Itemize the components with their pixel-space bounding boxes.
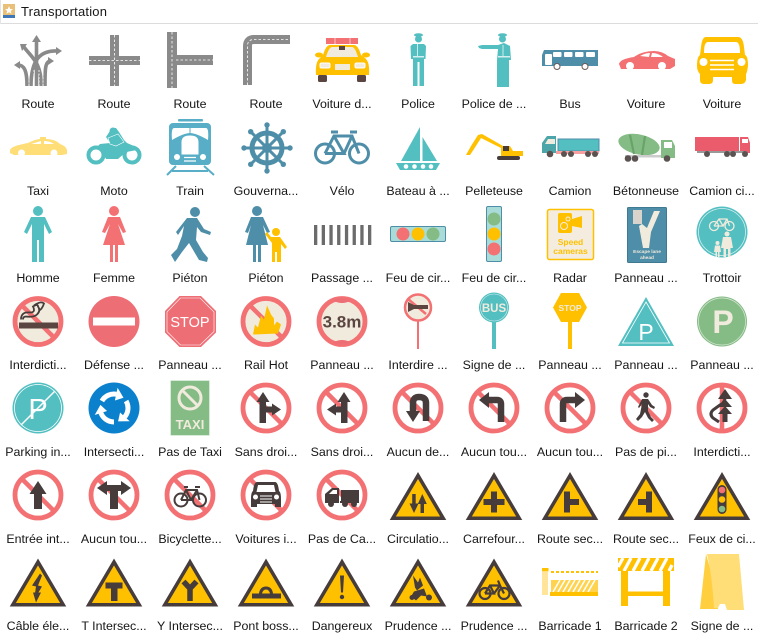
cell: Entrée interdite	[6, 472, 70, 546]
label: Panneau ...	[690, 358, 754, 372]
label: Route sec...	[537, 532, 603, 546]
cell: Vélo	[316, 132, 368, 198]
icon: arrows junction	[14, 35, 62, 86]
icon: no taxi sign: TAXI	[176, 417, 204, 432]
cell: Interdiction de dépasser	[693, 385, 751, 459]
icon: side road left	[621, 476, 671, 518]
label: Prudence ...	[385, 619, 451, 633]
cell: Femme	[93, 206, 135, 285]
icon: barricade one	[542, 568, 598, 596]
label: Route	[97, 97, 131, 111]
label: Aucun de...	[387, 445, 449, 459]
label: Pas de pi...	[615, 445, 677, 459]
cell: Trottoir	[696, 206, 748, 285]
cell: Aucun tourner droite	[537, 385, 603, 459]
cell: Câble électrique	[7, 562, 69, 633]
header icon	[3, 4, 15, 18]
icon: no overtaking	[699, 385, 745, 431]
label: Radar	[553, 271, 587, 285]
label: Aucun tou...	[537, 445, 603, 459]
icon: escape lane sign: Escape lane	[633, 249, 661, 255]
label: Piéton	[248, 271, 284, 285]
icon: excavator	[466, 134, 523, 160]
cell: Police de circulation	[462, 33, 526, 111]
cell: Bicyclettes interdites	[158, 472, 222, 546]
label: Câble éle...	[7, 619, 69, 633]
cell: Panneau 3.8m	[310, 298, 374, 372]
label: Passage ...	[311, 271, 373, 285]
icon: T intersection triangle	[89, 562, 139, 605]
icon: electric hazard triangle	[13, 562, 63, 605]
icon: T junction	[167, 32, 213, 88]
label: Bétonneuse	[613, 184, 679, 198]
label: Feux de ci...	[688, 532, 756, 546]
icon: red car	[619, 51, 675, 70]
label: Parking in...	[5, 445, 71, 459]
icon: roundabout	[88, 382, 140, 434]
label: Panneau ...	[614, 358, 678, 372]
cell: Voiture de police	[312, 38, 372, 111]
cell: Camion citerne	[689, 137, 755, 198]
icon: horizontal traffic light	[390, 226, 446, 242]
cell: Feu vertical	[462, 206, 526, 285]
icon: bus	[542, 50, 598, 70]
icon: sailboat	[396, 127, 440, 170]
cell: Bus	[542, 50, 598, 111]
cell: Panneau escape lane	[614, 208, 678, 285]
cell: Barricade 1	[538, 568, 602, 633]
icon: no straight or right	[243, 385, 289, 431]
cell: Voiture red	[619, 51, 675, 111]
cell: Interdiction de fumer	[9, 298, 67, 372]
icon: height limit: 3.8m	[323, 312, 361, 332]
label: Défense ...	[84, 358, 144, 372]
icon: taxi	[10, 137, 67, 156]
label: Carrefour...	[463, 532, 525, 546]
label: Y Intersec...	[157, 619, 223, 633]
label: Pelleteuse	[465, 184, 523, 198]
cell: Pelleteuse	[465, 134, 523, 198]
cell: Pas de piétons	[615, 385, 677, 459]
cell: Bateau	[386, 127, 450, 198]
icon: bicycle	[316, 132, 368, 163]
icon: no cars	[243, 472, 289, 518]
icon: speed camera sign: Speed	[558, 237, 583, 247]
icon: no entry	[88, 296, 140, 347]
icon: traffic light triangle	[697, 476, 747, 518]
icon: vertical traffic light	[486, 206, 502, 262]
icon: caution pedestrian triangle	[393, 562, 443, 605]
icon: no straight	[15, 472, 61, 518]
cell: Bétonneuse	[613, 130, 679, 198]
label: Moto	[100, 184, 128, 198]
icon: teal truck	[542, 136, 599, 157]
icon: woman	[102, 206, 126, 262]
cell: Panneau P circle	[690, 296, 754, 372]
icon: motorbike	[88, 128, 140, 162]
icon: stop octagon: STOP	[170, 315, 210, 331]
label: Pas de Taxi	[158, 445, 222, 459]
label: Aucun tou...	[81, 532, 147, 546]
icon: escape lane sign: ahead	[640, 255, 654, 261]
cell: Piéton with child	[245, 206, 287, 285]
label: Dangereux	[312, 619, 373, 633]
icon: policeman	[410, 33, 426, 86]
cell: Route corner	[248, 40, 290, 111]
cell: Route T	[167, 32, 213, 111]
icon: bus stop sign: BUS	[482, 303, 506, 315]
icon: caution bicycle triangle	[469, 562, 519, 605]
cell: Route junction	[14, 35, 62, 111]
cell: Carrefour	[463, 476, 525, 546]
cell: Pont bosse	[233, 562, 299, 633]
icon: stop on pole: STOP	[558, 303, 582, 313]
label: Voiture	[627, 97, 665, 111]
label: Camion ci...	[689, 184, 755, 198]
icon: no bicycles	[167, 472, 213, 518]
cell: Route secondaire left	[613, 476, 679, 546]
icon: traffic policeman	[478, 33, 511, 87]
icon: no u-turn	[395, 385, 441, 431]
icon: a-frame sign	[700, 554, 744, 610]
icon: hump bridge triangle	[241, 562, 291, 605]
label: Trottoir	[703, 271, 741, 285]
icon: no straight or left	[319, 385, 365, 431]
cell: Prudence bicycle	[461, 562, 527, 633]
icon: speed camera sign	[548, 210, 594, 260]
cell: Taxi	[10, 137, 67, 198]
icon: crossroads triangle	[469, 476, 519, 518]
cell: Circulation	[387, 476, 449, 546]
label: Voiture	[703, 97, 741, 111]
cell: Voitures interdites	[235, 472, 297, 546]
label: Train	[176, 184, 204, 198]
icon: no parking: P	[28, 394, 48, 426]
cell: Feu horizontal	[386, 226, 450, 285]
label: Pont boss...	[233, 619, 299, 633]
icon: two-way traffic triangle	[393, 476, 443, 518]
icon: no left turn	[471, 385, 517, 431]
cell: Défense d'entrer	[84, 296, 144, 372]
icon: side road right	[545, 476, 595, 518]
cell: Route secondaire right	[537, 476, 603, 546]
cell: Sans droit left	[311, 385, 373, 459]
label: Vélo	[330, 184, 355, 198]
label: Camion	[549, 184, 591, 198]
label: Bateau à ...	[386, 184, 450, 198]
icon: train	[167, 119, 214, 175]
icon: no left or right	[91, 472, 137, 518]
cell: Aucun tourner gauche	[461, 385, 527, 459]
icon: parking triangle: P	[638, 319, 654, 345]
icon: parent and child	[245, 206, 287, 262]
icon: escape lane sign	[628, 208, 666, 262]
cell: Prudence falling	[385, 562, 451, 633]
icon: police car	[315, 38, 370, 82]
label: Homme	[16, 271, 60, 285]
label: Route	[249, 97, 283, 111]
cell: Parking interdit	[5, 382, 71, 459]
cell: Aucun tournant	[81, 472, 147, 546]
cell: Interdire klaxon	[388, 294, 448, 372]
label: Interdicti...	[693, 445, 751, 459]
cell: Pas de Taxi	[158, 380, 222, 459]
cell: Sans droit right	[235, 385, 297, 459]
icon: crossroads	[89, 35, 140, 86]
cell: Moto	[88, 128, 140, 198]
icon: sidewalk sign	[696, 206, 748, 258]
label: Panneau ...	[614, 271, 678, 285]
icon: no smoking	[15, 298, 61, 344]
label: Interdire ...	[388, 358, 448, 372]
cell: Panneau P triangle	[614, 297, 678, 372]
label: Pas de Ca...	[308, 532, 376, 546]
header bar	[0, 0, 758, 24]
label: Circulatio...	[387, 532, 449, 546]
icon: yellow car front	[697, 37, 748, 84]
cell: Signe de chantier	[691, 554, 753, 633]
icon: road corner	[248, 40, 290, 85]
cell: Intersection giratoire	[84, 382, 144, 459]
label: T Intersec...	[81, 619, 147, 633]
label: Signe de ...	[463, 358, 525, 372]
label: Panneau ...	[158, 358, 222, 372]
cell: Panneau stop	[158, 296, 222, 372]
icon: pedestrian	[171, 207, 211, 262]
label: Route sec...	[613, 532, 679, 546]
label: Prudence ...	[461, 619, 527, 633]
cell: Gouvernail	[234, 122, 298, 198]
label: Police de ...	[462, 97, 526, 111]
label: Bus	[559, 97, 581, 111]
cell: Passage piéton	[311, 225, 373, 285]
cell: Police	[401, 33, 435, 111]
label: Femme	[93, 271, 135, 285]
icon: hot rail	[243, 298, 289, 344]
cell: Homme	[16, 206, 60, 285]
label: Taxi	[27, 184, 49, 198]
label: Feu de cir...	[462, 271, 526, 285]
icon: no trucks	[319, 472, 365, 518]
label: Bicyclette...	[158, 532, 222, 546]
title: Transportation	[21, 4, 107, 19]
label: Rail Hot	[244, 358, 289, 372]
label: Barricade 1	[538, 619, 602, 633]
label: Aucun tou...	[461, 445, 527, 459]
label: Gouverna...	[234, 184, 298, 198]
icon: speed camera sign: cameras	[553, 246, 588, 256]
icon: ship wheel	[241, 122, 293, 174]
label: Route	[21, 97, 55, 111]
cell: T Intersection	[81, 562, 147, 633]
cell: Feux de circulation	[688, 476, 756, 546]
label: Police	[401, 97, 435, 111]
cell: Dangereux	[312, 562, 373, 633]
label: Voiture d...	[312, 97, 372, 111]
label: Route	[173, 97, 207, 111]
label: Sans droi...	[311, 445, 373, 459]
cell: Train	[167, 119, 214, 198]
cell: Pas de Camions	[308, 472, 376, 546]
icon: warning triangle	[317, 562, 367, 605]
icon: no right turn	[547, 385, 593, 431]
icon: parking circle: P	[712, 304, 734, 340]
icon: red truck	[695, 137, 750, 157]
icon: no horn sign	[405, 294, 431, 349]
label: Panneau ...	[310, 358, 374, 372]
cell: Voiture yellow	[697, 37, 748, 111]
cell: Signe de bus	[463, 292, 525, 372]
label: Feu de cir...	[386, 271, 450, 285]
label: Intersecti...	[84, 445, 144, 459]
cell: Radar	[548, 210, 594, 285]
icon: no pedestrians	[623, 385, 669, 431]
cell: Route cross	[89, 35, 140, 111]
label: Voitures i...	[235, 532, 297, 546]
label: Panneau ...	[538, 358, 602, 372]
cell: Camion	[542, 136, 599, 198]
cell: Panneau stop hexagon	[538, 293, 602, 372]
icon: crosswalk	[314, 225, 371, 245]
label: Sans droi...	[235, 445, 297, 459]
label: Signe de ...	[691, 619, 753, 633]
cell: Piéton walking	[171, 207, 211, 285]
icon: concrete mixer	[616, 130, 675, 162]
label: Entrée int...	[6, 532, 70, 546]
cell: Rail Hot	[243, 298, 289, 372]
label: Barricade 2	[614, 619, 678, 633]
label: Piéton	[172, 271, 208, 285]
label: Interdicti...	[9, 358, 67, 372]
cell: Barricade 2	[614, 558, 678, 633]
icon: Y intersection triangle	[165, 562, 215, 605]
cell: Y Intersection	[157, 562, 223, 633]
icon: man	[24, 206, 52, 262]
cell: Aucun demi-tour	[387, 385, 449, 459]
icon: barricade two	[618, 558, 674, 606]
